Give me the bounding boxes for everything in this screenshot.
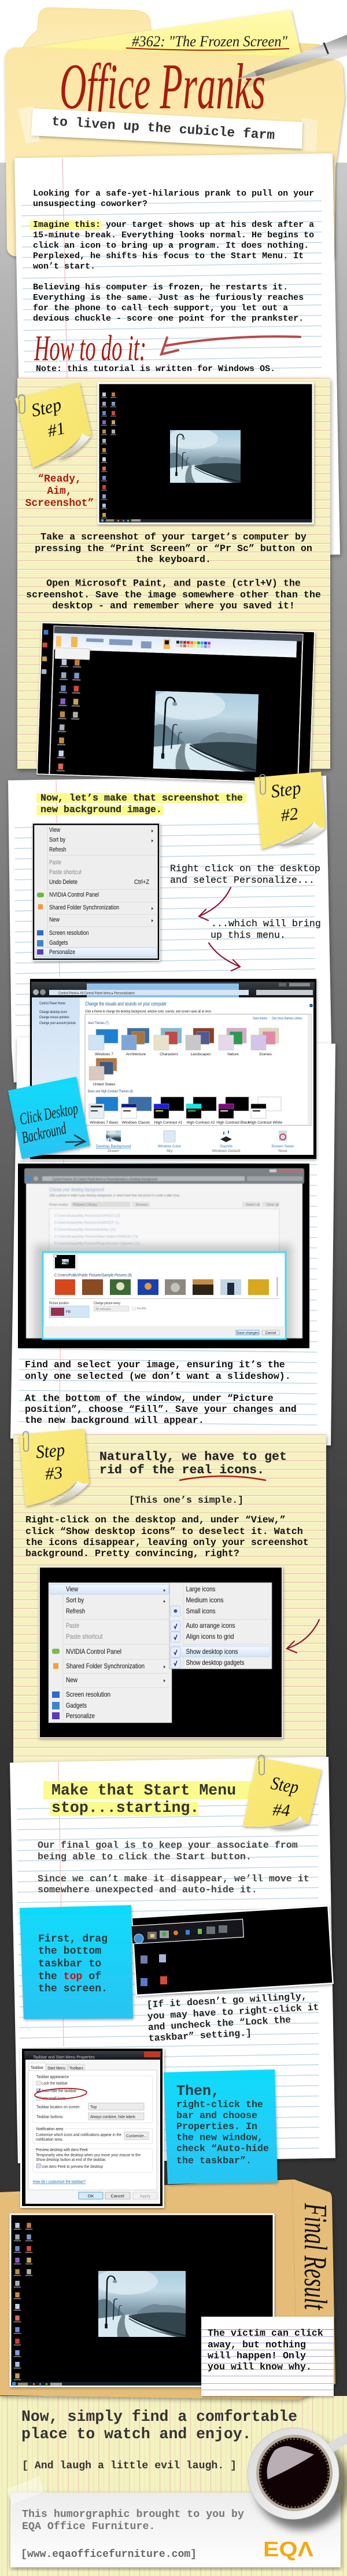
menu items: NVIDIA Control Panel: [49, 891, 99, 898]
menu caption: up this menu.: [211, 930, 286, 941]
arrow: to personalization window: [209, 943, 240, 971]
dimmed folder rows: C:\Users\Kasey\My Pictures\Katrina (15): [54, 1228, 116, 1232]
step 3 instructions: Right-click on the desktop and, under “View,”: [25, 1515, 286, 1526]
menu items: Paste shortcut: [49, 869, 82, 876]
step number: #1: [46, 419, 67, 441]
step 3 instructions: click “Show desktop icons” to deselect it. Watch: [25, 1526, 303, 1537]
dialog tabs: [29, 2063, 84, 2071]
step 4 intro: Since we can’t make it disappear, we’ll move it: [38, 1874, 309, 1885]
picture position controls: Fill: [66, 1311, 71, 1314]
dimmed heading: Choose your desktop background: [49, 1187, 104, 1192]
step 1 instruction two: Open Microsoft Paint, and paste (ctrl+V) the: [46, 578, 301, 589]
step 4 heading: [43, 1781, 251, 1817]
view submenu items: Medium icons: [186, 1596, 223, 1604]
step 4 intro: somewhere unexpected and auto-hide it.: [38, 1885, 257, 1896]
dimmed window: Browse...: [136, 1203, 150, 1207]
aero theme labels: Windows 7: [95, 1052, 113, 1056]
paint window: [49, 626, 303, 783]
intro scenario paragraph: click an icon to bring up a program. It does nothing.: [33, 241, 309, 251]
dimmed window: Control Panel ▸ All Control Panel Items ▸ Personalization ▸ Desktop Background: [52, 1178, 157, 1181]
panel: third notebook paper: [10, 1037, 335, 1445]
index card: [201, 2317, 334, 2396]
title card: [33, 10, 302, 64]
sidebar links: Control Panel Home: [39, 1002, 66, 1006]
paper clip: [23, 1432, 28, 1451]
step 2 heading: Now, let’s make that screenshot the: [40, 793, 243, 804]
menu items: Screen resolution: [49, 930, 89, 937]
window heading: Change the visuals and sounds on your computer: [85, 1001, 167, 1007]
main menu items: Screen resolution: [66, 1690, 110, 1698]
pen: [237, 35, 347, 87]
simple note: [This one’s simple.]: [129, 1495, 243, 1506]
find and select instructions: Find and select your image, ensuring it’s the: [25, 1360, 285, 1371]
basic theme labels: High Contrast #2: [187, 1121, 215, 1125]
dimmed window: [24, 1168, 304, 1338]
subtitle strip with tape: [18, 107, 318, 152]
footer closing text: [21, 2408, 297, 2472]
intro payoff paragraph: devious chuckle - score one point for the prankster.: [33, 314, 304, 324]
step label: Step: [35, 1439, 65, 1462]
step 2 heading: new background image.: [40, 805, 162, 816]
theme option icons: Sounds: [220, 1144, 233, 1148]
view submenu items: Show desktop gadgets: [186, 1658, 244, 1667]
sticky note: click desktop background: Backround: [20, 1119, 68, 1147]
step 1 instruction two: screenshot. Save the image somewhere other than the: [26, 590, 321, 601]
menu items: Personalize: [49, 949, 75, 956]
paper clip: [260, 775, 265, 794]
view submenu screenshot: [39, 1567, 282, 1738]
dialog tabs: Toolbars: [69, 2067, 83, 2071]
view submenu items: Show desktop icons: [186, 1647, 238, 1656]
taskbar properties dialog: [20, 2048, 164, 2208]
menu items: Gadgets: [49, 940, 68, 946]
sidebar links: Change your account picture: [39, 1022, 76, 1025]
auto-hide red circle: [35, 2087, 87, 2100]
credits card: [7, 2476, 341, 2567]
note text: Click Desktop: [18, 1099, 79, 1129]
step 4 intro: Our final goal is to keep your associate from: [38, 1840, 298, 1851]
sidebar links: Change desktop icons: [39, 1011, 67, 1014]
main menu items: Refresh: [66, 1607, 85, 1615]
basic theme labels: Windows 7 Basic: [90, 1121, 119, 1125]
ready aim screenshot caption: Screenshot”: [25, 498, 94, 509]
notification area: [33, 2127, 153, 2144]
final result label: Final Result: [297, 2203, 333, 2310]
note heading: Then,: [176, 2083, 220, 2100]
aero peek options: Use Aero Peek to preview the desktop: [42, 2165, 103, 2169]
folder tab: [23, 8, 152, 64]
find and select instructions: only one selected (we don’t want a slideshow).: [25, 1371, 291, 1382]
step 1 instruction one: Take a screenshot of your target’s computer by: [40, 532, 307, 543]
sticky note: click desktop background: [8, 1077, 90, 1159]
main menu items: [66, 1585, 145, 1720]
aero theme thumbnails: [88, 1028, 279, 1080]
main menu items: NVIDIA Control Panel: [66, 1647, 121, 1656]
theme option icons: Dream: [108, 1149, 119, 1153]
main menu items: Sort by: [66, 1596, 84, 1604]
context menu screenshot: [32, 823, 160, 961]
arrow: to menu: [199, 887, 231, 920]
panel: step 3 legal pad: [13, 1434, 326, 1764]
aero peek options: Temporarily view the desktop when you move your mouse to the: [36, 2153, 141, 2157]
taskbar appearance options: Use small icons: [42, 2097, 65, 2101]
dimmed folder rows: C:\Users\Kasey\My Pictures\Picasa\Screen Captures (11): [54, 1242, 140, 1246]
intro payoff paragraph: Believing his computer is frozen, he restarts it.: [33, 282, 288, 292]
red underline: [180, 1476, 265, 1480]
basic theme labels: High Contrast #1: [154, 1121, 183, 1125]
dialog title: Taskbar and Start Menu Properties: [33, 2054, 95, 2060]
EQA logo: EQΛ: [263, 2537, 313, 2561]
picture position controls: Shuffle: [136, 1307, 146, 1311]
view submenu items: Auto arrange icons: [186, 1621, 235, 1630]
coffee cup: [248, 2428, 347, 2530]
picture position controls: Change picture every:: [94, 1302, 121, 1305]
taskbar appearance options: Taskbar buttons:: [36, 2115, 64, 2119]
moved taskbar: [131, 1919, 243, 1944]
dimmed window: Clear all: [266, 1203, 279, 1207]
theme option icons: None: [278, 1149, 287, 1153]
step 3 instructions: background. Pretty convincing, right?: [25, 1548, 239, 1559]
folder front: [5, 47, 345, 258]
menu items: Refresh: [49, 846, 66, 853]
intro payoff paragraph: for the phone to call tech support, you let out a: [33, 303, 288, 313]
main menu items: Shared Folder Synchronization: [66, 1662, 145, 1670]
index card: you will know why.: [208, 2362, 312, 2373]
right click instruction: and select Personalize...: [170, 875, 315, 886]
sidebar links: [39, 1002, 76, 1025]
note text: the taskbar”.: [176, 2156, 252, 2167]
arrow: to heading: [161, 336, 300, 354]
aero theme labels: Nature: [227, 1052, 239, 1056]
intro question: Looking for a safe-yet-hilarious prank to pull on your: [33, 189, 314, 199]
note text: check “Auto-hide: [176, 2144, 269, 2155]
theme option icons: Windows Default: [212, 1149, 241, 1153]
dialog tabs: Start Menu: [47, 2067, 65, 2071]
step 4 heading: Make that Start Menu: [51, 1782, 236, 1799]
footer closing text: place to watch and enjoy.: [21, 2425, 252, 2443]
sidebar links: Change mouse pointers: [39, 1016, 69, 1019]
menu items: Shared Folder Synchronization: [49, 904, 119, 911]
panel: fourth notebook paper: [10, 1757, 335, 2163]
theme option icons: Window Color: [158, 1144, 182, 1148]
notification area: Customize...: [126, 2134, 147, 2138]
theme option icons: Sky: [167, 1149, 173, 1153]
paper clip: [19, 395, 25, 413]
taskbar appearance options: Always combine, hide labels: [90, 2115, 135, 2119]
main menu items: Paste shortcut: [66, 1632, 103, 1641]
notification area: Customize which icons and notifications appear in the: [36, 2133, 121, 2137]
intro scenario paragraph: Perplexed, he shifts his focus to the Start Menu. It: [33, 251, 304, 261]
intro question: unsuspecting coworker?: [33, 199, 147, 209]
step label: Step: [29, 394, 63, 421]
sticky note: then right-click: [164, 2069, 278, 2184]
ready aim screenshot caption: “Ready,: [38, 474, 82, 485]
step number: #4: [272, 1800, 290, 1821]
theme list box: Save theme: [253, 1017, 268, 1021]
main menu items: Personalize: [66, 1712, 95, 1720]
panel: step 1 legal pad: [17, 378, 330, 769]
dimmed window: Picture location:: [49, 1203, 69, 1207]
highlighted selection frame: [35, 1245, 292, 1346]
evil laugh aside: [ And laugh a little evil laugh. ]: [22, 2460, 237, 2472]
intro payoff paragraph: Everything is the same. Just as he furiously reaches: [33, 293, 304, 303]
sticky note: step 2: [254, 772, 326, 849]
menu items: Sort by: [49, 836, 65, 843]
aero theme labels: [93, 1052, 272, 1087]
aero peek options: Show desktop button at end of the taskbar.: [36, 2158, 106, 2162]
step 3 heading: Naturally, we have to get: [99, 1450, 287, 1464]
aero theme labels: United States: [93, 1082, 116, 1087]
step number: #3: [45, 1463, 63, 1484]
taskbar appearance options: Taskbar appearance: [36, 2075, 69, 2079]
dialog buttons: OK: [88, 2193, 94, 2199]
step label: Step: [270, 1772, 300, 1797]
main menu items: Paste: [66, 1621, 79, 1630]
step 1 instruction one: pressing the “Print Screen” or “Pr Sc” button on: [35, 544, 312, 555]
taskbar appearance options: [33, 2075, 153, 2123]
sticky note: first drag: [20, 1905, 133, 2019]
aero theme labels: Scenes: [259, 1052, 272, 1056]
view submenu items: Align icons to grid: [186, 1632, 234, 1641]
note line: Note: this tutorial is written for Windows OS.: [36, 364, 275, 374]
ready aim screenshot caption: Aim,: [47, 486, 72, 497]
menu items: Ctrl+Z: [134, 879, 149, 886]
picture position controls: Picture position:: [49, 1302, 69, 1305]
website: [www.eqaofficefurniture.com]: [21, 2549, 197, 2560]
note text: taskbar to: [38, 1958, 101, 1970]
step 1 instruction one: the keyboard.: [136, 555, 211, 566]
step number: #2: [279, 804, 300, 825]
personalize highlight: [36, 948, 157, 957]
step 3 instructions: the icons disappear, leaving only your screenshot: [25, 1537, 309, 1548]
dimmed description: Click a picture to make it your desktop background, or select more than one picture to create a slide show.: [49, 1194, 180, 1198]
main menu items: New: [66, 1676, 77, 1684]
view submenu items: Small icons: [186, 1607, 215, 1615]
step label: Step: [270, 777, 302, 802]
taskbar appearance options: Auto-hide the taskbar: [42, 2089, 77, 2093]
final desktop screenshot: [10, 2214, 274, 2386]
note text: the new window,: [176, 2133, 263, 2144]
aero peek options: Preview desktop with Aero Peek: [36, 2148, 88, 2152]
dialog buttons: Cancel: [110, 2193, 124, 2199]
dialog buttons: Apply: [140, 2193, 151, 2199]
note arrow: [66, 1135, 85, 1146]
subtitle strip with tape: to liven up the cubicle farm: [51, 114, 275, 143]
paste tooltip: [55, 648, 90, 660]
panel: second notebook paper: [8, 776, 331, 1082]
credits text: EQA Office Furniture.: [22, 2521, 155, 2533]
notification area: Notification area: [36, 2127, 63, 2131]
step 4 heading: stop...starting.: [51, 1799, 199, 1817]
dialog tabs: Taskbar: [31, 2066, 44, 2070]
window subheading: Click a theme to change the desktop background, window color, sounds, and screen saver all at once.: [85, 1010, 212, 1014]
step 1 instruction two: desktop - and remember where you saved it!: [52, 601, 295, 612]
footer closing text: Now, simply find a comfortable: [21, 2408, 297, 2425]
save and cancel buttons: [236, 1330, 279, 1335]
manila final result folder: [0, 2179, 347, 2576]
dialog buttons: [79, 2192, 157, 2199]
intro scenario paragraph: Imagine this: your target shows up at his desk after a: [33, 220, 314, 230]
note text: right-click the: [176, 2100, 263, 2111]
save and cancel buttons: Cancel: [265, 1331, 276, 1335]
aero theme labels: Landscapes: [190, 1052, 211, 1056]
dimmed folder rows: C:\Users\Kasey\My Pictures\101HP320 (13): [54, 1214, 120, 1218]
panel: intro notebook paper: [14, 153, 340, 559]
help link: How do I customize the taskbar?: [33, 2180, 86, 2184]
basic theme thumbnails: [89, 1097, 281, 1118]
sticky note: step 3: [19, 1429, 89, 1506]
theme option icons: [96, 1130, 295, 1153]
step 1 screenshot: [98, 383, 313, 523]
theme option icons: Screen Saver: [271, 1144, 295, 1148]
arrow: to show desktop icons: [287, 1620, 319, 1653]
note text: bar and choose: [176, 2111, 257, 2122]
menu items: View: [49, 827, 60, 834]
right click instruction: Right click on the desktop: [170, 864, 320, 875]
selected screenshot thumbnail: [53, 1254, 77, 1270]
menu items: Undo Delete: [49, 879, 77, 886]
main menu items: View: [66, 1585, 78, 1593]
taskbar screenshot: [131, 1906, 333, 1995]
taskbar bracket note: you may have to right-click it: [147, 2002, 319, 2022]
dimmed folder rows: [54, 1214, 140, 1246]
view highlight: [50, 1584, 169, 1594]
step 4 intro: being able to click the Start button.: [38, 1852, 252, 1863]
taskbar appearance options: Taskbar location on screen:: [36, 2105, 80, 2109]
index card: away, but nothing: [208, 2340, 306, 2351]
highlight: imagine this: [30, 221, 101, 230]
theme list box: Get more themes online: [272, 1017, 302, 1021]
find and select instructions: the new background will appear.: [25, 1415, 204, 1426]
sample picture thumbnails: [55, 1277, 278, 1296]
close button: [144, 2052, 160, 2057]
taskbar appearance options: Top: [90, 2105, 97, 2109]
step 3 heading: rid of the real icons.: [99, 1463, 264, 1477]
aero theme labels: Characters: [160, 1052, 179, 1056]
taskbar appearance options: Lock the taskbar: [42, 2082, 68, 2086]
aero peek options: [33, 2148, 153, 2173]
theme list box: Aero Themes (7): [88, 1022, 109, 1025]
aero theme labels: Architecture: [126, 1052, 146, 1056]
dimmed window: Pictures Library: [73, 1203, 97, 1207]
intro scenario paragraph: won’t start.: [33, 262, 95, 271]
sticky note: step 4: [243, 1755, 322, 1829]
theme list box: Basic and High Contrast Themes (6): [88, 1090, 133, 1093]
find and select instructions: position”, choose “Fill”. Save your changes and: [25, 1404, 297, 1415]
dimmed folder rows: C:\Users\Kasey\My Pictures\New folder\10066230 (74): [54, 1235, 138, 1239]
dimmed window: Select all: [246, 1203, 260, 1207]
note text: the screen.: [38, 1983, 108, 1995]
menu items: Paste: [49, 859, 61, 866]
view submenu items: Large icons: [186, 1585, 215, 1593]
pale legal paper footer: [0, 2396, 347, 2576]
main menu items: Gadgets: [66, 1701, 87, 1709]
notification area: notification area.: [36, 2138, 63, 2142]
note text: Properties. In: [176, 2122, 257, 2133]
show desktop icons highlight: [171, 1646, 270, 1657]
desktop background window screenshot: [18, 1164, 309, 1348]
picture position controls: 30 minutes: [95, 1308, 111, 1311]
menu caption: ...which will bring: [211, 919, 321, 930]
menu items: [49, 827, 149, 956]
note text: the bottom: [38, 1946, 101, 1957]
basic theme labels: High Contrast Black: [216, 1121, 250, 1125]
sample pictures heading: C:\Users\Public\Public Pictures\Sample Pictures (8): [54, 1274, 132, 1278]
issue title: #362: "The Frozen Screen": [132, 33, 287, 50]
basic theme labels: [90, 1121, 282, 1125]
note text: the top of: [38, 1971, 101, 1983]
how to do it heading: How to do it:: [34, 329, 146, 368]
dimmed folder rows: C:\Users\Kasey\My Pictures\101MSDCF (1): [54, 1221, 119, 1225]
index card: will happen! Only: [208, 2351, 306, 2362]
paper clip: [259, 1755, 264, 1775]
address text: Control Panel ▸ All Control Panel Items ▸ Personalization: [58, 992, 135, 996]
manila folder header: [5, 8, 347, 258]
paint screenshot: [36, 622, 317, 785]
taskbar bracket note: taskbar” setting.]: [148, 2027, 252, 2044]
picture position controls: [49, 1302, 146, 1318]
basic theme labels: Windows Classic: [121, 1121, 150, 1125]
taskbar bracket note: and uncheck the “Lock the: [147, 2014, 291, 2033]
step 2 heading: [36, 793, 246, 816]
theme option icons: Desktop Background: [96, 1144, 131, 1148]
credits text: This humorgraphic brought to you by: [22, 2509, 244, 2520]
view submenu items: [186, 1585, 244, 1667]
taskbar bracket note: [If it doesn’t go willingly,: [146, 1991, 307, 2010]
sticky note: step 1: [15, 383, 91, 468]
menu items: New: [49, 916, 60, 923]
folder back right corner: [295, 43, 328, 58]
personalization window screenshot: [30, 979, 316, 1159]
index card: The victim can click: [208, 2328, 323, 2339]
basic theme labels: High Contrast White: [249, 1121, 282, 1125]
intro scenario paragraph: 15-minute break. Everything looks normal. He begins to: [33, 230, 314, 240]
save and cancel buttons: Save changes: [237, 1331, 259, 1335]
theme list box: [85, 1014, 311, 1125]
note text: First, drag: [38, 1933, 108, 1945]
find and select instructions: At the bottom of the window, under “Picture: [25, 1393, 274, 1404]
